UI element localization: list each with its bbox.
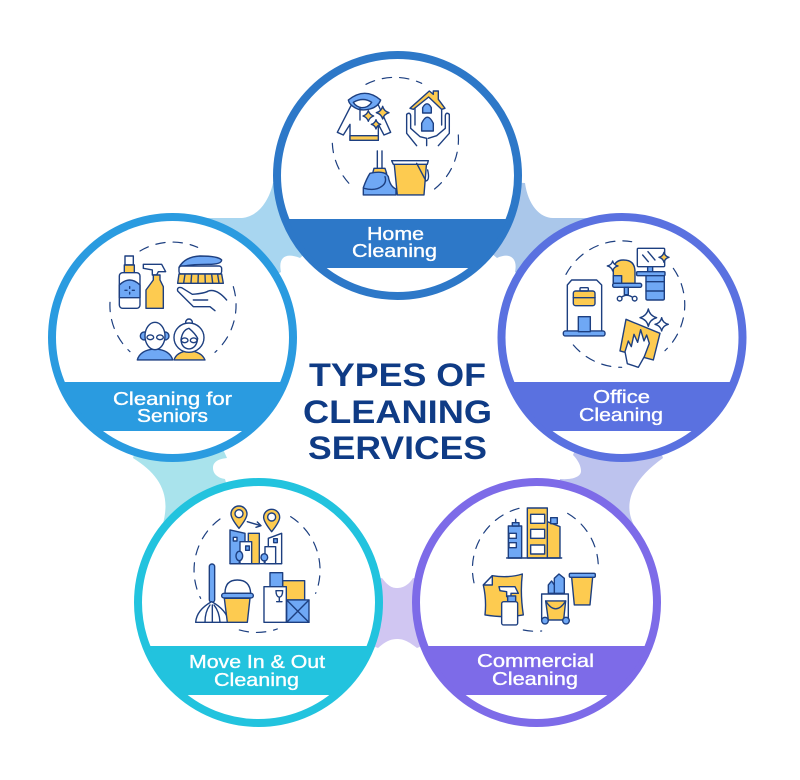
label: office cleaning — [579, 387, 663, 425]
panel: cleaning for seniors — [52, 217, 293, 458]
panel: commercial cleaning — [416, 482, 657, 723]
icon: home cleaning group — [332, 77, 458, 195]
label: office cleaning: Cleaning — [579, 405, 663, 425]
connector: home to office — [397, 175, 622, 337]
label: home cleaning — [352, 224, 437, 261]
label: move in and out cleaning: Cleaning — [214, 670, 299, 690]
connector: move to seniors — [133, 337, 258, 602]
label: move in and out cleaning — [189, 652, 325, 690]
connector: commercial to move — [258, 578, 536, 648]
title: TYPES OF — [309, 357, 486, 393]
icon: office cleaning group — [563, 241, 685, 367]
label: commercial cleaning — [477, 651, 594, 689]
connector: office to commercial — [536, 337, 663, 602]
panel: home cleaning — [277, 55, 518, 296]
label: home cleaning: Home — [367, 224, 424, 244]
label: home cleaning: Cleaning — [352, 241, 437, 261]
label: cleaning for seniors: Seniors — [137, 406, 208, 426]
label: office cleaning: Office — [593, 387, 650, 407]
icon: seniors cleaning group — [110, 242, 236, 360]
icon: commercial group — [472, 508, 598, 631]
label: move in and out cleaning: Move In & Out — [189, 652, 325, 672]
title — [303, 357, 492, 466]
label: cleaning for seniors: Cleaning for — [113, 389, 232, 409]
panel: office cleaning — [502, 217, 742, 458]
title: SERVICES — [308, 430, 487, 466]
label: cleaning for seniors — [113, 389, 232, 426]
icon: moving group — [194, 506, 320, 632]
label: commercial cleaning: Commercial — [477, 651, 594, 671]
connector: seniors to home — [172, 175, 397, 337]
title: CLEANING — [303, 394, 492, 430]
panel: move in and out cleaning — [138, 482, 379, 723]
label: commercial cleaning: Cleaning — [492, 669, 578, 689]
